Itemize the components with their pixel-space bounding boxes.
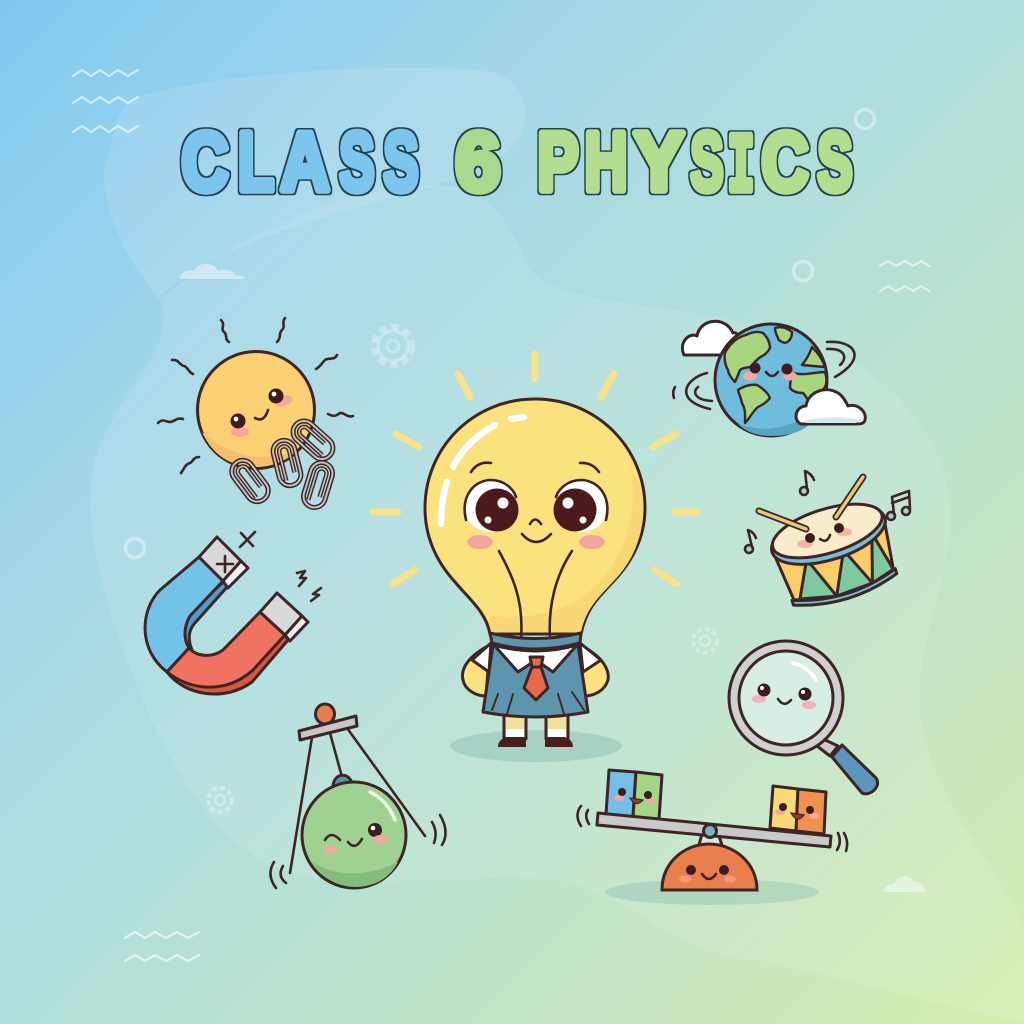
title: C <box>762 115 808 208</box>
decorative rings <box>126 110 874 558</box>
title: H <box>584 115 628 208</box>
sun with paperclips <box>158 318 353 510</box>
drum body <box>764 493 904 616</box>
handle neck <box>817 739 838 756</box>
lens glass <box>739 651 833 745</box>
title: S <box>690 115 724 208</box>
drum triangles <box>788 530 896 607</box>
title: A <box>280 115 330 208</box>
title: 6 <box>456 115 500 208</box>
title: Y <box>634 115 684 208</box>
drum face <box>797 523 852 548</box>
continents <box>725 327 826 423</box>
base shadow <box>605 879 819 905</box>
blue arm inner depth <box>184 582 228 650</box>
right cloud <box>796 390 865 424</box>
globe <box>715 324 827 436</box>
decorative gears <box>208 327 717 812</box>
spin motion lines <box>673 342 855 409</box>
filaments <box>499 551 572 638</box>
spinning earth <box>673 321 865 436</box>
drum sticks <box>759 477 863 529</box>
title: S <box>384 115 418 208</box>
knob <box>316 704 334 724</box>
background blob: large centre <box>91 185 1024 1024</box>
title: S <box>340 115 374 208</box>
ground shadow <box>450 730 622 762</box>
red tie <box>524 657 548 700</box>
globe shade <box>738 402 822 436</box>
plus signs <box>217 532 255 572</box>
magnifying glass <box>729 641 878 794</box>
decorative clouds <box>180 264 925 892</box>
orange dome <box>662 844 757 890</box>
paperclips <box>227 416 337 510</box>
legs and shoes <box>498 715 573 747</box>
sun squiggles <box>158 318 353 473</box>
pivot <box>704 824 716 838</box>
pivot stand <box>699 830 722 845</box>
left cloud <box>682 321 739 355</box>
title: P <box>538 115 578 208</box>
sun disc <box>198 352 314 468</box>
title <box>182 115 852 215</box>
bulb shading <box>489 470 643 632</box>
strings <box>290 728 425 873</box>
earth face <box>743 362 797 380</box>
background blob: upper <box>104 68 525 300</box>
title: C <box>182 115 228 208</box>
lens face <box>752 684 816 709</box>
blue pole <box>145 557 223 672</box>
blue uniform <box>483 645 588 717</box>
face <box>464 463 608 549</box>
smiling drum <box>745 471 910 616</box>
collar band <box>490 633 581 649</box>
right block <box>770 786 826 834</box>
left block <box>606 770 662 819</box>
handle <box>832 745 878 794</box>
swing motion lines <box>270 815 446 888</box>
sun face <box>230 388 294 437</box>
bulb glass <box>425 399 645 634</box>
sun shade <box>202 432 298 467</box>
ball face <box>324 823 389 854</box>
wobble lines <box>578 806 847 851</box>
music notes <box>745 471 910 553</box>
dome face <box>679 865 736 882</box>
title: I <box>728 121 754 215</box>
spark marks <box>297 571 321 601</box>
ball <box>302 782 406 888</box>
ball highlight <box>370 792 395 820</box>
red arm depth <box>167 634 288 694</box>
bulb rays <box>373 354 698 584</box>
lens ring <box>729 641 843 755</box>
title: S <box>818 115 852 208</box>
drum head <box>766 493 888 569</box>
upper rim <box>765 494 892 576</box>
plank <box>597 813 831 847</box>
red pole <box>167 612 285 687</box>
balance scale <box>578 770 847 905</box>
horseshoe magnet <box>145 532 321 694</box>
central bulb character <box>373 354 698 762</box>
lower rim <box>792 569 900 614</box>
bulb highlights <box>441 417 524 524</box>
top bar <box>299 716 357 740</box>
ball cap <box>333 775 352 786</box>
pendulum <box>270 704 446 888</box>
arms <box>462 643 608 696</box>
ball shade <box>312 862 398 887</box>
title: L <box>238 115 274 208</box>
decorative wave marks <box>73 70 929 961</box>
pole caps <box>199 537 241 581</box>
